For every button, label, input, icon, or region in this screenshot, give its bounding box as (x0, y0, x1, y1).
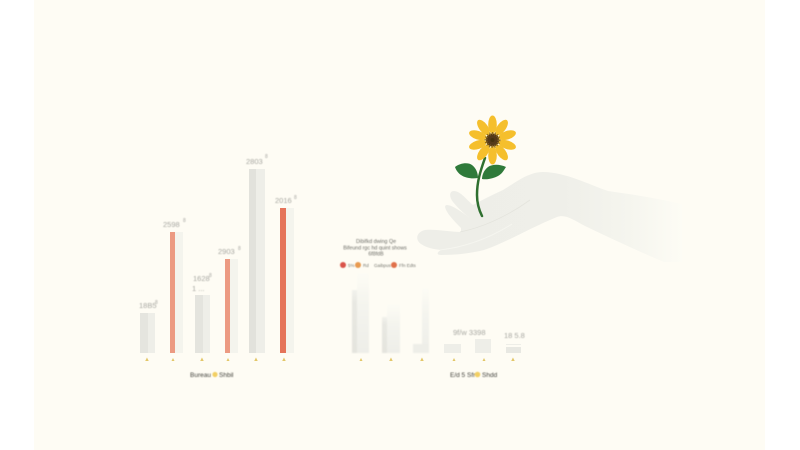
bar 5 (249, 169, 265, 353)
value labels (139, 154, 297, 310)
axis markers: ▲ (144, 357, 150, 363)
value labels: 8 (155, 300, 158, 306)
value labels: 9f/w 3398 (453, 328, 486, 337)
axis markers: ▴ (226, 357, 230, 363)
icon: stem (477, 158, 485, 216)
axis markers: ▴ (359, 357, 363, 363)
bar 2 (170, 232, 183, 353)
axis markers (359, 357, 516, 363)
bar 1 (352, 273, 369, 353)
value labels: 1628 (193, 274, 210, 283)
bar 3 (413, 288, 429, 353)
axis markers: ▴ (452, 357, 456, 363)
bar 4 (444, 344, 461, 353)
chart legend (340, 262, 417, 268)
value labels: 8 (265, 154, 268, 160)
axis markers: ▲ (419, 357, 425, 363)
chart heading: Dibifkd dwing Qe (356, 239, 396, 245)
chart legend: Gaibpus (374, 263, 392, 268)
value labels: 1 ... (192, 284, 205, 293)
chart heading (343, 239, 407, 258)
legend: Shbil (219, 372, 234, 379)
chart heading: 6f8fdB (368, 252, 384, 258)
chart legend: Rd (363, 263, 369, 268)
value labels: 2803 (246, 157, 263, 166)
value labels: 8 (183, 218, 186, 224)
bar 3 (195, 295, 210, 353)
value labels: 8 (238, 246, 241, 252)
axis markers (144, 357, 287, 363)
axis markers: ▲ (510, 357, 516, 363)
icon: open hand (417, 172, 682, 262)
right bar chart (340, 239, 525, 379)
legend: Bureau (190, 372, 211, 379)
axis markers: ▴ (171, 357, 175, 363)
chart legend: Ffn Edts (399, 263, 417, 268)
value labels: 2598 (163, 220, 180, 229)
legend: Shdd (482, 372, 498, 379)
axis markers: ▲ (388, 357, 394, 363)
axis markers: ▲ (281, 357, 287, 363)
bar 4 (225, 259, 238, 353)
bar 5 (475, 339, 491, 353)
value labels: 2903 (218, 247, 235, 256)
bar 6 (280, 208, 294, 353)
icon: left leaf (455, 163, 478, 178)
value labels: 2016 (275, 196, 292, 205)
legend: E/d 5 Sfr - (450, 372, 479, 379)
icon: right leaf (482, 165, 506, 179)
left bar chart (139, 154, 297, 379)
value labels (453, 328, 525, 340)
bar 1 (140, 313, 155, 353)
illustration: hand holding sunflower (417, 116, 682, 262)
axis markers: ▴ (482, 357, 486, 363)
value labels: 8 (294, 195, 297, 201)
axis markers: ▲ (253, 357, 259, 363)
legend (450, 372, 498, 379)
chart heading: Bifeund rgc hd quint shows (343, 246, 407, 252)
value labels: 18 5.8 (504, 331, 525, 340)
icon: sunflower (468, 116, 517, 164)
value labels: 18B5 (139, 301, 157, 310)
axis markers: ▲ (199, 357, 205, 363)
bar 2 (382, 304, 400, 353)
legend (190, 372, 234, 379)
chart legend: 5% (348, 263, 355, 268)
bar 6 (506, 344, 521, 353)
value labels: 8 (209, 273, 212, 279)
